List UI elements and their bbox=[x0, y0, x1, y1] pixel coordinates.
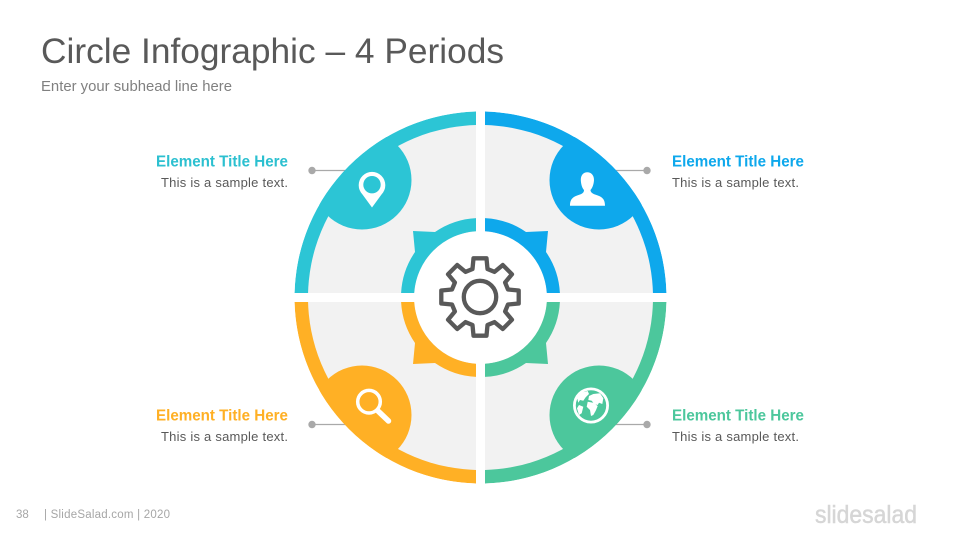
quadrant: bottom right bbox=[485, 302, 666, 484]
inner spiked arc: bottom left bbox=[401, 302, 476, 377]
label: bottom right: Element Title Here bbox=[672, 408, 804, 424]
center white disc bbox=[414, 231, 547, 364]
icon: magnifier bbox=[358, 390, 388, 421]
subhead: Enter your subhead line here bbox=[41, 78, 232, 95]
logo: slidesalad bbox=[815, 501, 917, 529]
footer: | SlideSalad.com | 2020 bbox=[44, 509, 170, 521]
label: bottom right: This is a sample text. bbox=[672, 429, 799, 444]
label: top right bbox=[672, 154, 804, 190]
label: top left: Element Title Here bbox=[156, 154, 288, 170]
footer: 38 bbox=[16, 509, 29, 521]
label: top left: This is a sample text. bbox=[161, 175, 288, 190]
label: top left bbox=[156, 154, 288, 190]
label: top right: Element Title Here bbox=[672, 154, 804, 170]
label: bottom left bbox=[156, 408, 288, 444]
connector: bottom right bbox=[612, 421, 651, 428]
connector: top right bbox=[612, 167, 651, 174]
icon: map pin bbox=[359, 172, 385, 208]
inner spiked arc: top right bbox=[485, 218, 560, 293]
icon: globe bbox=[574, 389, 608, 422]
inner spiked arc: bottom right bbox=[485, 302, 560, 377]
label: top right: This is a sample text. bbox=[672, 175, 799, 190]
quadrant: bottom left bbox=[294, 302, 476, 484]
label: bottom left: Element Title Here bbox=[156, 408, 288, 424]
inner spiked arc: top left bbox=[401, 218, 476, 293]
quadrant: top right bbox=[485, 112, 666, 293]
connector: bottom left bbox=[308, 421, 348, 428]
icon: person bbox=[570, 172, 605, 206]
icon: gear bbox=[441, 258, 519, 336]
title: Circle Infographic – 4 Periods bbox=[41, 32, 504, 71]
connector: top left bbox=[308, 167, 348, 174]
label: bottom left: This is a sample text. bbox=[161, 429, 288, 444]
label: bottom right bbox=[672, 408, 804, 444]
quadrant: top left bbox=[294, 112, 476, 293]
